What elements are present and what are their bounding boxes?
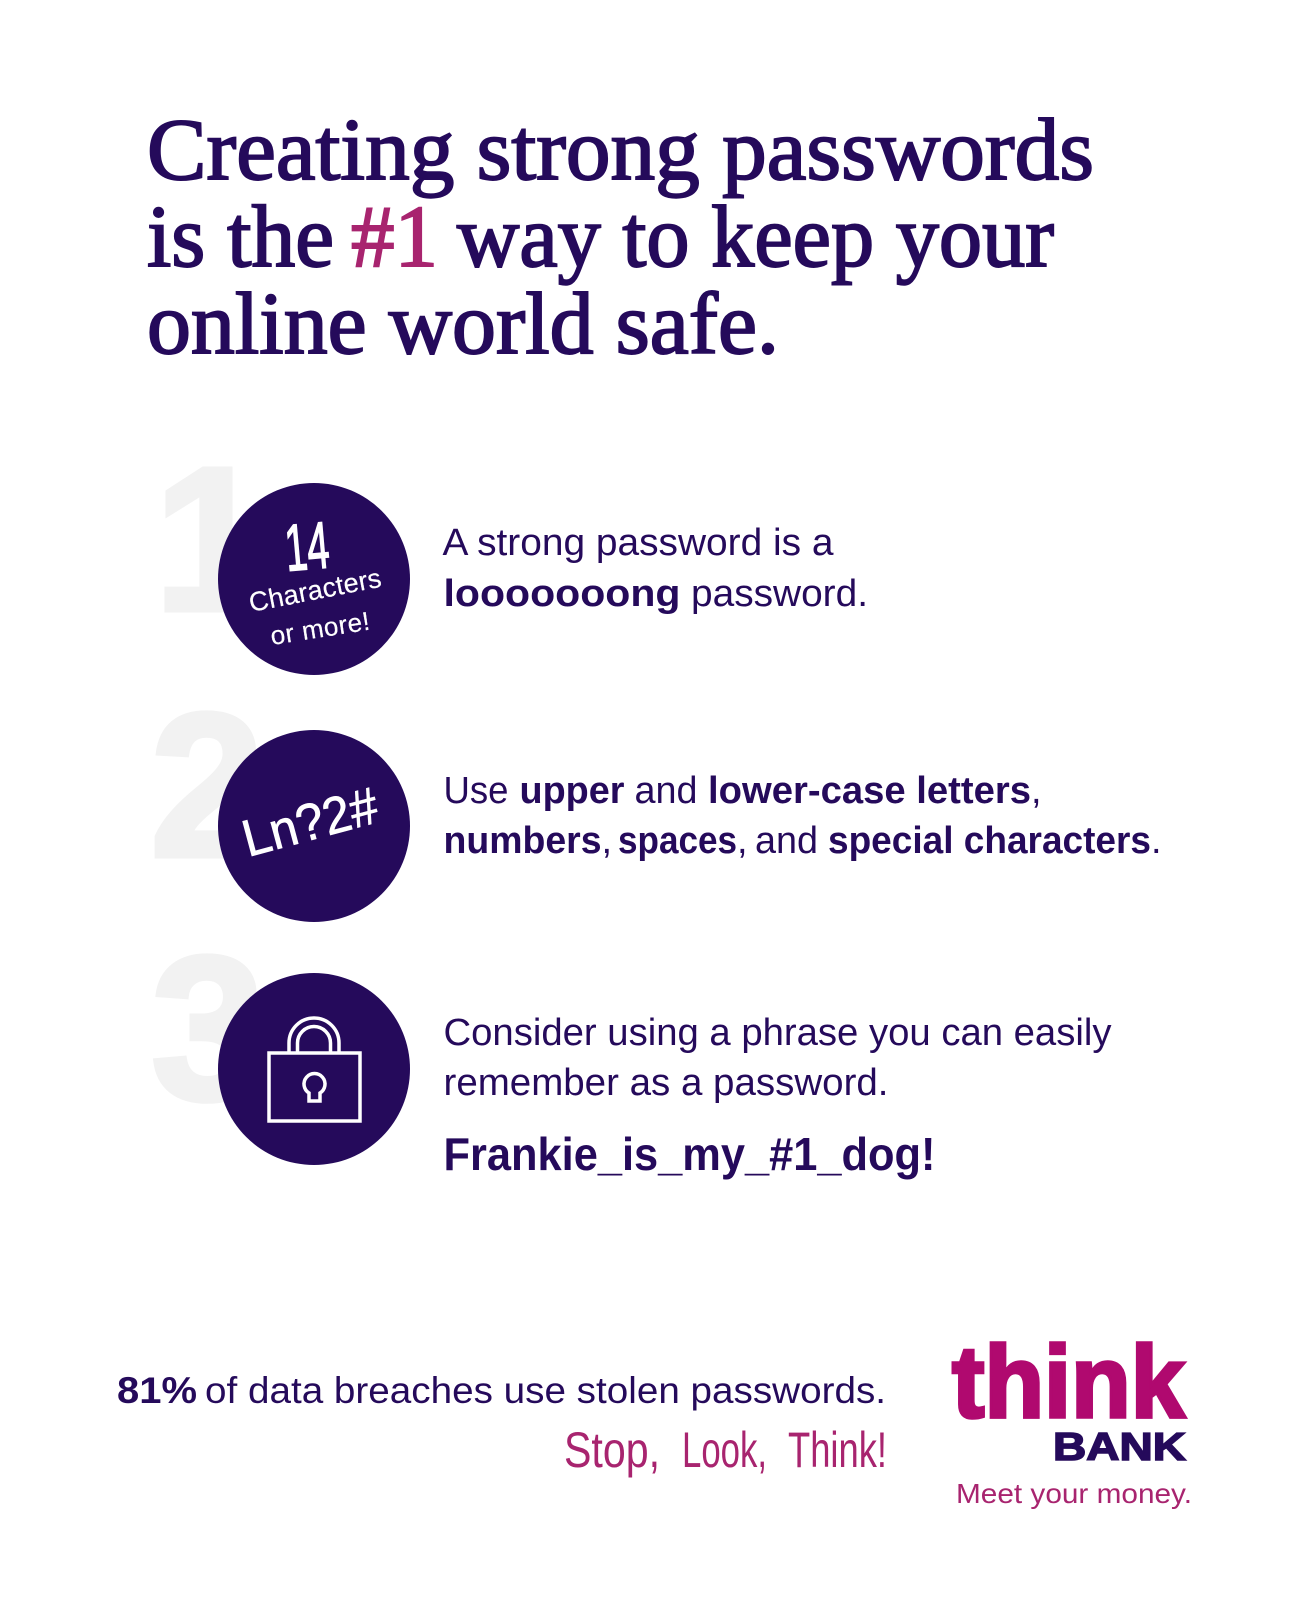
text: character variety: , xyxy=(1031,770,1042,812)
title: way to keep your xyxy=(457,189,1054,286)
logo xyxy=(952,1325,1192,1509)
circle badge: sample characters: Ln?2# xyxy=(236,777,384,869)
numeral 3: 3 xyxy=(151,914,265,1143)
text: character variety xyxy=(444,770,1162,862)
numeral 1: 1 xyxy=(154,425,268,654)
text: character variety: , xyxy=(602,820,612,862)
text: long password: A strong password is a xyxy=(442,522,834,564)
text: character variety: upper xyxy=(520,770,625,812)
text: character variety: numbers xyxy=(444,820,602,862)
text: passphrase xyxy=(444,1012,1112,1180)
step 3 xyxy=(151,914,1112,1180)
text: long password: looooooong xyxy=(444,573,680,615)
step 1 xyxy=(154,425,868,675)
circle badge: padlock xyxy=(218,973,410,1165)
logo: think xyxy=(952,1325,1185,1439)
title xyxy=(147,102,1094,373)
text: passphrase: Consider using a phrase you can easily xyxy=(444,1012,1112,1054)
text: character variety: lower-case letters xyxy=(708,770,1031,812)
text: character variety: spaces xyxy=(618,820,737,862)
handwritten slogan xyxy=(564,1422,887,1478)
text: character variety: special characters xyxy=(828,820,1151,862)
title: Creating strong passwords xyxy=(147,102,1094,199)
circle badge: 14 characters or more: 14 xyxy=(282,507,332,585)
handwritten slogan: Think! xyxy=(788,1422,887,1478)
text: character variety: and xyxy=(634,770,698,812)
text: character variety: , xyxy=(737,820,748,862)
step 2 xyxy=(150,671,1162,922)
text: character variety: Use xyxy=(444,770,508,812)
logo: BANK xyxy=(1053,1426,1186,1469)
circle badge: 14 characters or more: Characters xyxy=(246,563,384,618)
text: long password xyxy=(442,522,868,615)
title: online world safe. xyxy=(147,276,779,373)
text: character variety: and xyxy=(755,820,818,862)
text: passphrase: remember as a password. xyxy=(444,1062,888,1104)
text: passphrase: Frankie_is_my_#1_dog! xyxy=(444,1128,936,1180)
logo: Meet your money. xyxy=(956,1478,1192,1509)
statistic: 81% xyxy=(117,1370,197,1411)
handwritten slogan: Stop, xyxy=(564,1422,660,1478)
circle badge: 14 characters or more xyxy=(218,483,410,675)
text: character variety: . xyxy=(1151,820,1162,862)
title: is the xyxy=(147,189,334,286)
statistic: of data breaches use stolen passwords. xyxy=(205,1370,886,1411)
numeral 2: 2 xyxy=(150,671,264,900)
circle badge: 14 characters or more: or more! xyxy=(268,606,372,651)
text: long password: password. xyxy=(691,573,868,615)
circle badge: sample characters xyxy=(218,730,410,922)
title: #1 xyxy=(351,189,438,286)
handwritten slogan: Look, xyxy=(682,1422,767,1478)
